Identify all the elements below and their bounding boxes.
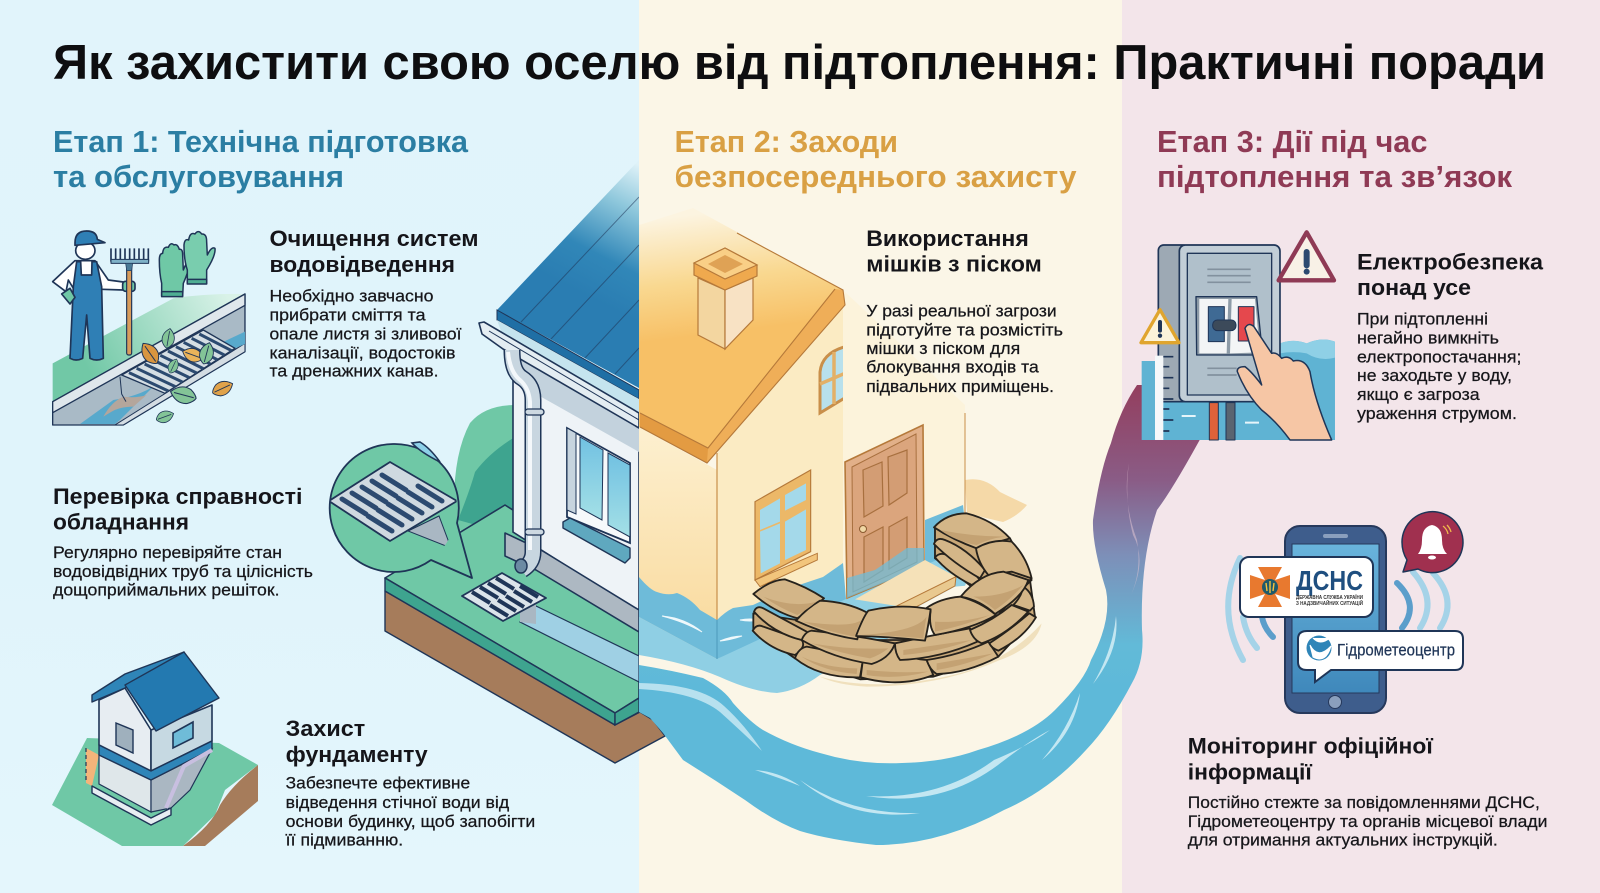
text block: sandbags: підвальних приміщень. (866, 377, 1054, 396)
text block: cleaning drainage: Необхідно завчасно (270, 287, 434, 306)
DSNS card: ДЕРЖАВНА СЛУЖБА УКРАЇНИ (1296, 594, 1363, 601)
drain pipe (166, 750, 212, 808)
drainage channel (520, 606, 639, 682)
icon: gloves (159, 232, 215, 297)
text block: electrical safety: якщо є загроза (1357, 385, 1480, 404)
text block: foundation protection: відведення стічної води від (286, 793, 509, 812)
text block: sandbags: У разі реальної загрози (866, 302, 1057, 321)
text block: cleaning drainage: водовідведення (270, 252, 455, 277)
icon: worker (53, 231, 135, 360)
icon: DSNS emblem (1250, 567, 1290, 607)
Hydromet card: Гідрометеоцентр (1337, 642, 1455, 660)
wall of blue house (512, 380, 639, 608)
text block: sandbags: мішки з піском для (866, 339, 1020, 358)
bag shading (763, 530, 1023, 677)
panel: stage 3 background (1122, 0, 1600, 893)
plinth (92, 786, 171, 825)
panel: stage 1 background (0, 0, 639, 893)
illustration: electrical panel (1141, 232, 1335, 440)
text block: sandbags: підготуйте та розмістіть (866, 320, 1063, 339)
gutter (479, 322, 639, 428)
text block: monitoring: Постійно стежте за повідомленнями ДСНС, (1188, 793, 1540, 812)
text block: equipment check: Регулярно перевіряйте стан (53, 543, 282, 562)
heading: stage 1: Етап 1: Технічна підготовка (53, 124, 469, 159)
text block: equipment check: водовідвідних труб та цілісність (53, 562, 313, 581)
bottom row bags (753, 626, 803, 655)
text block: sandbags: блокування входів та (866, 358, 1039, 377)
text block: monitoring: інформації (1188, 760, 1313, 785)
window (563, 428, 630, 563)
text block: cleaning drainage: прибрати сміття та (270, 306, 426, 325)
text block: electrical safety: негайно вимкніть (1357, 328, 1499, 347)
heading: stage 2: Етап 2: Заходи (674, 124, 898, 159)
text block: equipment check: Перевірка справності (53, 484, 302, 509)
door and window (116, 723, 133, 753)
text block: electrical safety: При підтопленні (1357, 309, 1488, 328)
roof (639, 208, 845, 463)
text block: cleaning drainage (270, 226, 478, 381)
icon: leaves (137, 328, 235, 425)
text block: electrical safety: електропостачання; (1357, 347, 1521, 366)
text block: foundation protection: Забезпечте ефективне (286, 774, 470, 793)
arched window (820, 346, 848, 413)
text block: cleaning drainage: та дренажних канав. (270, 362, 438, 381)
icon: gutter grate (122, 330, 235, 393)
icon: ground grate (462, 573, 546, 621)
text block: equipment check: дощоприймальних решіток. (53, 581, 280, 600)
DSNS card: ДСНС (1296, 565, 1363, 596)
text block: electrical safety: Електробезпека (1357, 249, 1544, 274)
Hydromet card (1298, 631, 1463, 682)
bag backing (753, 527, 1035, 679)
text block: monitoring: Гідрометеоцентру та органів місцевої влади (1188, 812, 1547, 831)
illustration: worker cleaning gutter (53, 231, 245, 425)
text block: monitoring: Моніторинг офіційної (1188, 734, 1434, 759)
heading: stage 3: Етап 3: Дії під час (1157, 124, 1428, 159)
DSNS card (1240, 557, 1373, 617)
ground and soil (52, 738, 258, 846)
left wall (639, 427, 717, 659)
illustration: house foundation (52, 652, 258, 846)
icon: rake (111, 248, 149, 355)
door step (855, 560, 970, 609)
downspout (512, 350, 533, 570)
sand patch (965, 479, 1027, 522)
illustration: cream house (639, 208, 1027, 693)
text block: cleaning drainage: Очищення систем (270, 226, 478, 251)
walls (99, 688, 151, 771)
text block: cleaning drainage: опале листя зі зливової (270, 325, 462, 344)
text block: foundation protection: Захист (286, 716, 365, 741)
icon: small warning triangle (1141, 310, 1179, 343)
text block: electrical safety (1357, 249, 1544, 423)
text block: equipment check: обладнання (53, 510, 189, 535)
text block: monitoring: для отримання актуальних інструкцій. (1188, 831, 1498, 850)
water gauge (1155, 356, 1173, 440)
heading: stage 1 (53, 124, 469, 194)
top front bags (753, 579, 824, 618)
text block: electrical safety: ураження струмом. (1357, 404, 1517, 423)
heading: stage 3: підтоплення та зв’язок (1157, 159, 1512, 194)
text block: monitoring (1188, 734, 1547, 850)
flood water on walls (639, 563, 846, 659)
icon: hand (1237, 325, 1332, 440)
flood water on floor (639, 513, 985, 693)
panel front (1179, 245, 1280, 402)
brown soil under the ground slab (385, 591, 665, 763)
roof (92, 652, 184, 702)
heading: stage 3 (1157, 124, 1512, 194)
ground (53, 294, 245, 402)
text block: sandbags: Використання (866, 226, 1029, 251)
text block: foundation protection (285, 716, 535, 850)
cables (1209, 403, 1218, 440)
text block: cleaning drainage: каналізації, водостоків (270, 343, 456, 362)
heading: stage 2: безпосереднього захисту (674, 159, 1077, 194)
river highlights (639, 463, 1140, 815)
sand shadow (820, 623, 1042, 687)
door (845, 425, 924, 598)
text block: sandbags: мішків з піском (866, 252, 1042, 277)
icon: Hydromet logo (1306, 636, 1332, 660)
text block: sandbags (866, 226, 1063, 396)
gutter water (80, 387, 153, 424)
side window (755, 470, 817, 587)
wall plinth (505, 533, 639, 632)
roof (497, 160, 639, 388)
illustration: phone alerts (1228, 512, 1463, 713)
panel: stage 2 background (639, 0, 1122, 893)
panel back (1158, 245, 1188, 402)
gutter body (53, 294, 245, 425)
waterproofing strip (86, 748, 99, 786)
icon: bell bubble (1402, 512, 1463, 573)
middle row bags (802, 631, 895, 664)
ground slab (385, 505, 639, 713)
DSNS card: З НАДЗВИЧАЙНИХ СИТУАЦІЙ (1296, 599, 1363, 607)
breaker switches (1196, 297, 1263, 355)
icon: bush behind house (454, 405, 512, 531)
back stack bags (935, 554, 980, 585)
river flowing through the stages (639, 385, 1240, 845)
heading: stage 1: та обслуговування (53, 159, 344, 194)
text block: electrical safety: понад усе (1357, 275, 1471, 300)
text block: foundation protection: її підмиванню. (285, 831, 403, 850)
title: Як захистити свою оселю від підтоплення: Практичні поради (53, 36, 1546, 90)
foundation block (99, 755, 151, 812)
icon: chimney (694, 248, 757, 349)
text block: equipment check (53, 484, 313, 600)
illustration: blue house with drainage (329, 160, 665, 763)
icon: large warning triangle (1279, 232, 1334, 280)
flood water (1142, 340, 1335, 440)
text block: electrical safety: не заходьте у воду, (1357, 366, 1512, 385)
phone body (1285, 526, 1386, 713)
text block: foundation protection: основи будинку, щоб запобігти (286, 812, 535, 831)
signal waves (1228, 558, 1448, 660)
text block: foundation protection: фундаменту (286, 742, 428, 767)
callout: grate detail (329, 442, 472, 578)
gable wall (717, 303, 843, 659)
sandbag wall (753, 513, 1042, 687)
heading: stage 2 (674, 124, 1077, 194)
